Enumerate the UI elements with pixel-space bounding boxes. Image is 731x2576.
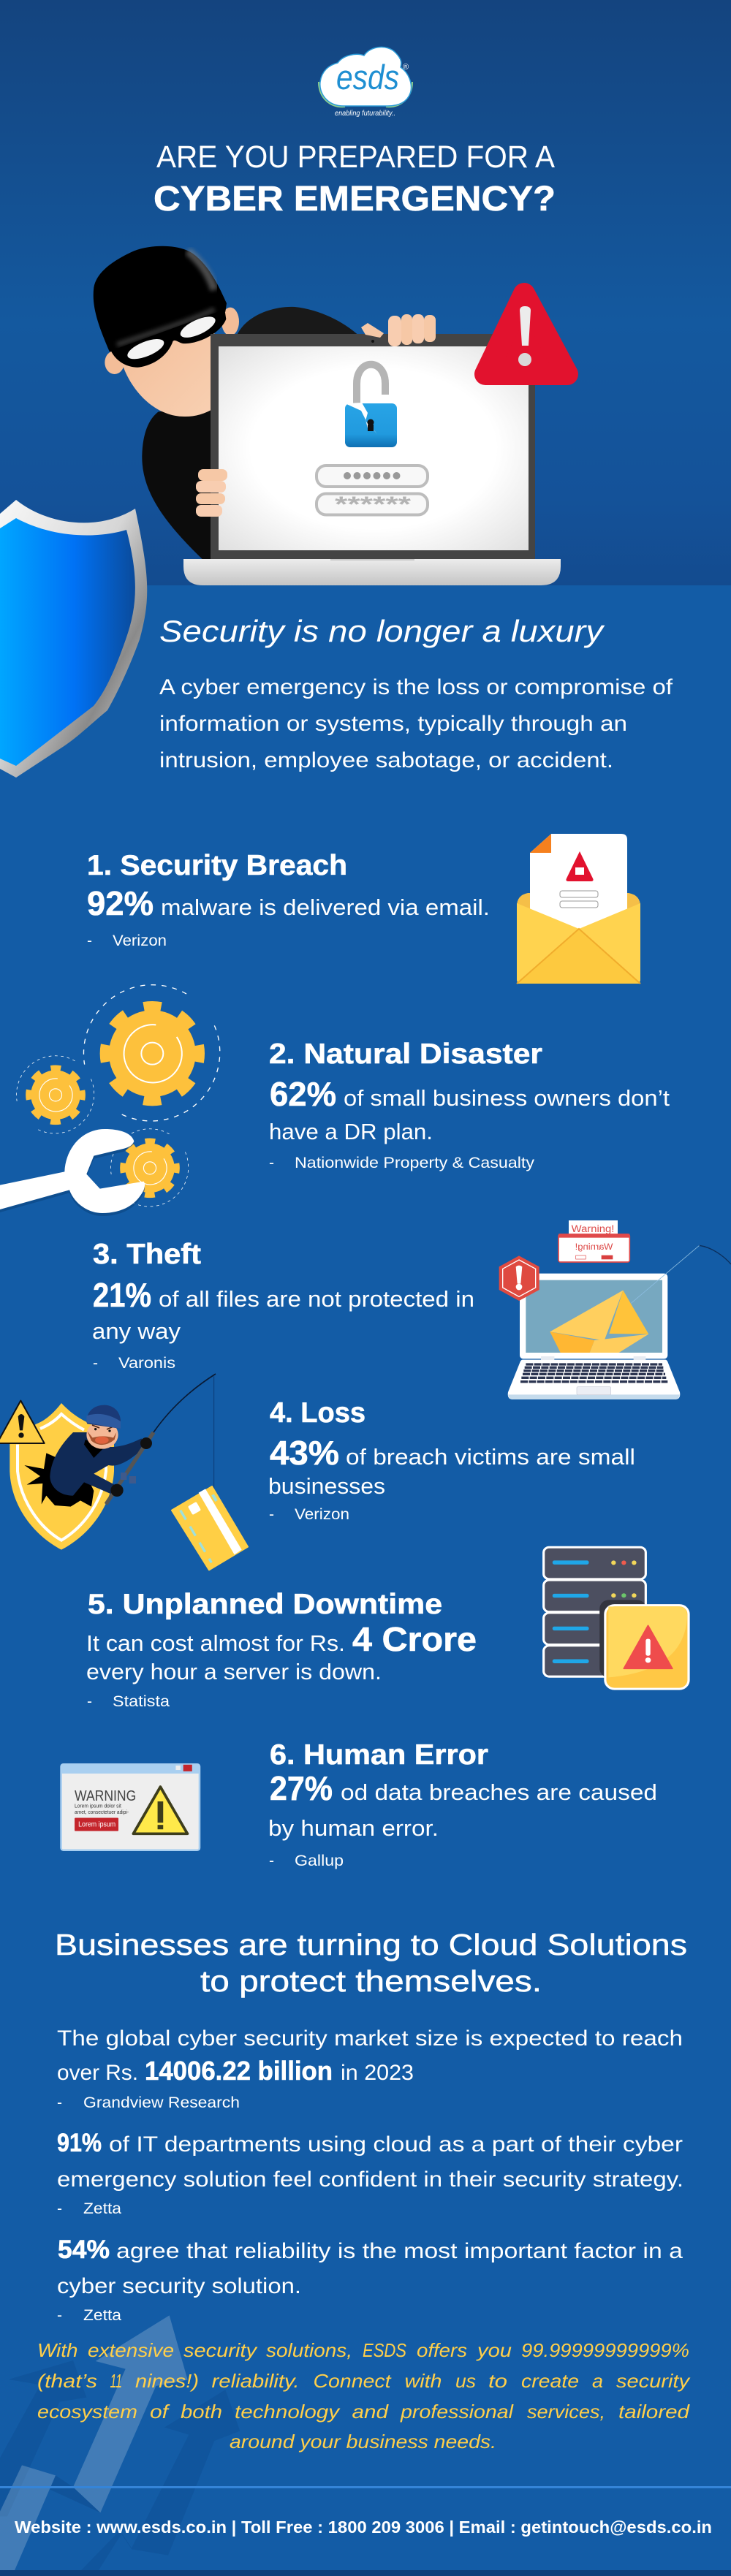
closing statement: create (521, 2370, 579, 2392)
stat: 54% agree: agree that reliability is the most important factor in a (116, 2239, 683, 2263)
icon: laptop with phishing email and warning popup: Warning! (575, 1242, 613, 1252)
section 5: unplanned downtime: It can cost almost for Rs. (86, 1630, 345, 1656)
stat: 91% of IT departments: 91% (57, 2129, 102, 2157)
heading: cloud solutions (55, 1928, 687, 1998)
icon: gears and wrench (0, 985, 220, 1216)
section 3: theft: - (93, 1355, 98, 1372)
closing statement: both (181, 2401, 222, 2423)
logo: esds cloud: esds (336, 58, 399, 96)
stat: market size (57, 2026, 683, 2111)
heading: cloud solutions: Businesses are turning to Cloud Solutions (55, 1928, 687, 1961)
stat: 91% of IT departments: Zetta (83, 2200, 121, 2217)
section 2: natural disaster: 62% (270, 1075, 336, 1113)
illustration: thief behind laptop (94, 246, 561, 585)
section 2: natural disaster: - (269, 1155, 274, 1171)
intro paragraph: A cyber emergency is the loss or compromise of (159, 675, 673, 699)
section 2: natural disaster: have a DR plan. (269, 1119, 433, 1144)
footer contact bar: Website : www.esds.co.in | Toll Free : 1800 209 3006 | Email : getintouch@esds.co.in (15, 2518, 712, 2537)
stat: 54% agree: Zetta (83, 2307, 121, 2324)
closing statement: and (352, 2401, 390, 2423)
section 6: human error (268, 1739, 657, 1869)
heading: cloud solutions: to protect themselves. (200, 1964, 542, 1998)
closing statement: us (455, 2370, 476, 2392)
closing statement: (that’s (37, 2370, 97, 2392)
stat: market size: Grandview Research (83, 2094, 240, 2111)
closing statement: security (183, 2339, 258, 2361)
icon: warning dialog window: amet, consectetuer adipi- (75, 1809, 129, 1815)
icon: hacker fishing through shield (0, 1374, 248, 1570)
stat: market size: over Rs. (57, 2061, 138, 2085)
section 5: unplanned downtime: Statista (113, 1693, 170, 1710)
intro paragraph (159, 675, 673, 772)
logo: esds cloud (319, 47, 412, 118)
section 1: security breach (87, 850, 490, 949)
section 4: loss: businesses (268, 1473, 385, 1499)
section 2: natural disaster (269, 1038, 670, 1171)
icon: warning dialog window: Lorem ipsum (78, 1821, 115, 1829)
closing statement: professional (400, 2401, 514, 2423)
section 1: security breach: 1. Security Breach (87, 850, 347, 881)
section 2: natural disaster: Nationwide Property & Casualty (295, 1155, 535, 1171)
closing statement: ESDS (363, 2339, 407, 2361)
closing statement (37, 2339, 691, 2452)
closing statement: to (488, 2370, 507, 2392)
decorative upward arrows (0, 2315, 240, 2576)
icon: broken padlock (345, 365, 397, 447)
closing statement: services, (527, 2401, 605, 2423)
intro paragraph: information or systems, typically through an (159, 712, 627, 736)
stat: market size: - (57, 2094, 62, 2111)
closing statement: 11 (110, 2370, 122, 2392)
password fields (317, 466, 428, 517)
icon: warning dialog window (61, 1764, 200, 1850)
closing statement: you (476, 2339, 512, 2361)
section 5: unplanned downtime: 4 Crore (352, 1620, 477, 1658)
section 2: natural disaster: 2. Natural Disaster (269, 1038, 542, 1070)
icon: laptop with phishing email and warning popup (499, 1220, 731, 1399)
icon: laptop with phishing email and warning popup: Warning! (572, 1223, 614, 1234)
section 6: human error: 6. Human Error (270, 1739, 488, 1771)
closing statement: solutions, (266, 2339, 352, 2361)
section 4: loss: Verizon (295, 1506, 349, 1523)
section 6: human error: Gallup (295, 1853, 344, 1869)
stat: market size: 14006.22 billion (145, 2056, 333, 2086)
closing statement: offers (417, 2339, 467, 2361)
closing statement: With (37, 2339, 77, 2361)
closing statement: with (405, 2370, 442, 2392)
icon: server with warning folder (544, 1547, 689, 1689)
title: CYBER EMERGENCY? (154, 180, 556, 219)
closing statement: around your business needs. (230, 2431, 496, 2452)
closing statement: 99.99999999999% (521, 2339, 689, 2361)
section 5: unplanned downtime: every hour a server is down. (86, 1659, 382, 1684)
section 5: unplanned downtime (86, 1589, 477, 1710)
stat: 54% agree (57, 2235, 683, 2324)
closing statement: nines!) (135, 2370, 199, 2392)
section 1: security breach: malware is delivered via email. (161, 894, 490, 920)
section 5: unplanned downtime: - (87, 1693, 92, 1710)
icon: red warning triangle (485, 294, 567, 374)
logo: esds cloud: ® (403, 63, 409, 72)
intro paragraph: intrusion, employee sabotage, or accident. (159, 748, 613, 772)
section 1: security breach: - (87, 932, 92, 949)
closing statement: of (150, 2401, 170, 2423)
section 4: loss: - (269, 1506, 274, 1523)
stat: market size: in 2023 (341, 2061, 414, 2085)
icon: warning dialog window: WARNING (75, 1787, 136, 1804)
stat: 54% agree: - (57, 2307, 62, 2324)
laptop base (183, 559, 561, 585)
title (154, 140, 556, 219)
closing statement: technology (235, 2401, 341, 2423)
section 6: human error: by human error. (268, 1815, 439, 1841)
closing statement: ecosystem (37, 2401, 137, 2423)
hands (196, 314, 436, 517)
icon: warning dialog window: Lorem ipsum dolor sit (75, 1803, 122, 1809)
section 4: loss: 4. Loss (270, 1397, 366, 1429)
stat: market size: The global cyber security market size is expected to reach (57, 2026, 683, 2051)
section 1: security breach: 92% (87, 884, 154, 922)
section 4: loss: 43% (270, 1434, 339, 1472)
laptop frame (211, 334, 535, 559)
closing statement: a (592, 2370, 603, 2392)
section 3: theft: Varonis (118, 1355, 175, 1372)
section 2: natural disaster: of small business owners don’t (344, 1085, 670, 1111)
intro: security is no longer a luxury: Security is no longer a luxury (159, 614, 605, 648)
section 6: human error: 27% (270, 1769, 333, 1807)
stat: 91% of IT departments: emergency solution feel confident in their security strategy. (57, 2167, 683, 2192)
section 4: loss: of breach victims are small (346, 1444, 635, 1470)
footer contact bar (0, 2486, 731, 2576)
section 6: human error: - (269, 1853, 274, 1869)
icon: blue shield (0, 500, 147, 778)
stat: 91% of IT departments: - (57, 2200, 62, 2217)
section 3: theft: any way (92, 1318, 181, 1344)
title: ARE YOU PREPARED FOR A (156, 140, 555, 175)
intro: security is no longer a luxury (159, 614, 673, 772)
section 3: theft: of all files are not protected in (159, 1286, 474, 1312)
closing statement: reliability. (212, 2370, 300, 2392)
closing statement: security (616, 2370, 691, 2392)
section 3: theft: 3. Theft (93, 1239, 201, 1270)
icon: envelope with alert (517, 834, 640, 984)
stat: 54% agree: cyber security solution. (57, 2274, 301, 2298)
section 5: unplanned downtime: 5. Unplanned Downtime (88, 1589, 442, 1620)
closing statement: Connect (313, 2370, 392, 2392)
section 4: loss (268, 1397, 635, 1523)
stat: 91% of IT departments: of IT departments using cloud as a part of their cyber (109, 2132, 683, 2157)
stat: 91% of IT departments (57, 2129, 683, 2217)
logo: esds cloud: enabling futurability.. (335, 110, 395, 118)
closing statement: tailored (618, 2401, 691, 2423)
section 3: theft: 21% (93, 1276, 151, 1314)
section 3: theft (92, 1239, 474, 1372)
section 1: security breach: Verizon (113, 932, 167, 949)
stat: 54% agree: 54% (58, 2235, 110, 2264)
password fields: ****** (335, 493, 411, 517)
closing statement: extensive (88, 2339, 174, 2361)
section 6: human error: od data breaches are caused (341, 1779, 657, 1805)
